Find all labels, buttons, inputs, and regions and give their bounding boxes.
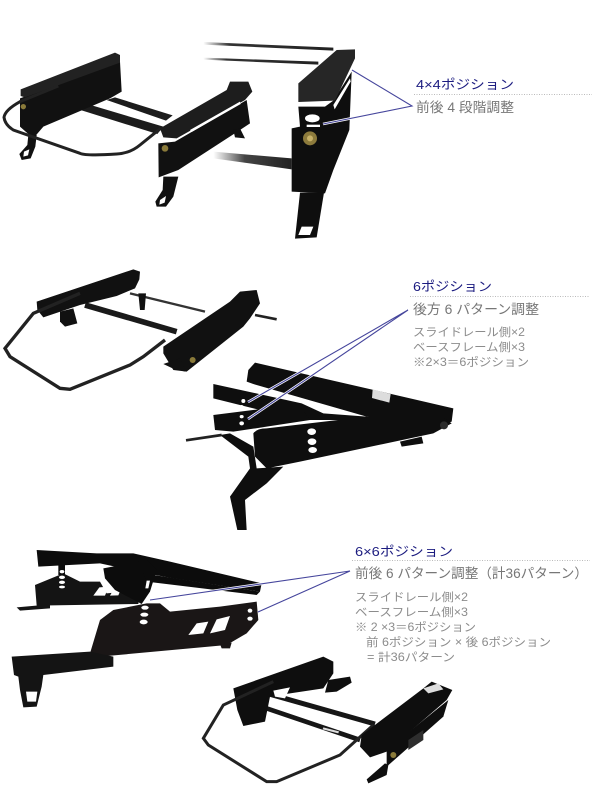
notes — [355, 591, 551, 664]
description: 前後 4 段階調整 — [416, 99, 515, 115]
notes: ベースフレーム側×3 — [355, 606, 468, 619]
folded lower rail — [186, 363, 453, 530]
centre rail — [155, 82, 252, 207]
upper left rail — [37, 269, 146, 327]
notes: ベースフレーム側×3 — [413, 341, 525, 354]
notes: 前 6ポジション × 後 6ポジション — [366, 635, 551, 649]
text block: 4x4 position — [414, 77, 592, 115]
photo: 6x6 folded rail — [12, 550, 262, 707]
heading: 6ポジション — [413, 279, 492, 294]
photo: 6 position seat rail set — [5, 269, 453, 530]
hoop lever — [5, 293, 165, 389]
notes: ※ 2 ×3＝6ポジション — [355, 621, 476, 634]
heading: 4×4ポジション — [416, 77, 514, 92]
front rail — [360, 682, 452, 783]
far bars fading out — [203, 42, 333, 169]
cross bars — [262, 693, 375, 740]
rear rail — [233, 657, 352, 726]
hoop lever — [203, 682, 373, 782]
description: 前後 6 パターン調整（計36パターン） — [355, 565, 588, 581]
slide rail — [37, 550, 262, 604]
notes — [413, 326, 529, 369]
front hoop lever — [4, 86, 161, 155]
upper right rail — [163, 290, 277, 372]
upper plate — [17, 573, 140, 611]
text block: 6x6 position — [352, 544, 590, 664]
notes: = 計36パターン — [367, 650, 455, 664]
text block: 6 position — [410, 279, 590, 369]
cross bars — [85, 293, 205, 332]
left rail — [19, 53, 122, 160]
callout lines: 4x4 — [323, 70, 412, 124]
cross bars — [43, 93, 173, 134]
base bar and bracket — [12, 652, 113, 707]
notes: ※2×3＝6ポジション — [413, 356, 529, 369]
lower plate — [90, 602, 258, 657]
callout lines: 6x6 — [150, 571, 350, 612]
callout lines: 6 position — [248, 310, 408, 419]
notes: スライドレール側×2 — [355, 591, 468, 604]
photo: 4x4 seat rail set — [4, 42, 355, 239]
notes: スライドレール側×2 — [413, 326, 525, 339]
heading: 6×6ポジション — [355, 544, 453, 559]
description: 後方 6 パターン調整 — [413, 302, 540, 317]
large right rail — [292, 49, 355, 239]
photo: 6x6 seat rail set — [203, 657, 452, 783]
